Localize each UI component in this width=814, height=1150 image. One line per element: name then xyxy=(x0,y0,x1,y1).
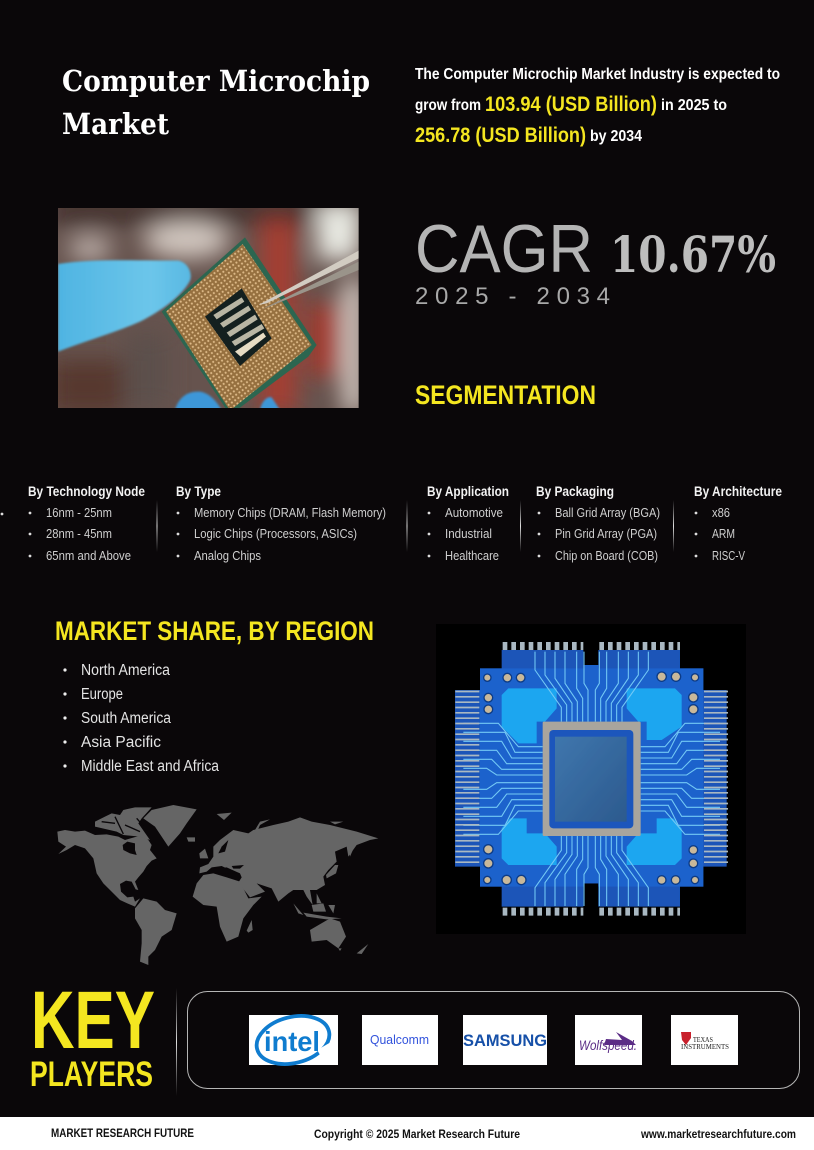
logo: texas instruments: INSTRUMENTS xyxy=(681,1043,729,1051)
logo: qualcomm: Qualcomm xyxy=(370,1032,429,1047)
footer: Copyright © 2025 Market Research Future xyxy=(314,1127,520,1141)
footer xyxy=(0,1117,814,1150)
segment: by type xyxy=(176,483,386,563)
region list: South America xyxy=(81,710,171,727)
segment: by technology node xyxy=(1,483,145,563)
segment: by architecture xyxy=(694,483,782,563)
key players panel xyxy=(188,992,800,1088)
title: Computer Microchip xyxy=(62,64,370,98)
segment: by architecture: ARM xyxy=(712,527,735,541)
segment: by architecture: By Architecture xyxy=(694,483,782,499)
CAGR figure xyxy=(415,211,776,310)
market size statement: 256.78 (USD Billion) xyxy=(415,124,586,147)
segment: by packaging: Ball Grid Array (BGA) xyxy=(555,506,660,520)
key players heading: PLAYERS xyxy=(30,1055,153,1094)
footer: MARKET RESEARCH FUTURE xyxy=(51,1126,194,1140)
logo: samsung: SAMSUNG xyxy=(463,1031,547,1050)
segment: by type: Logic Chips (Processors, ASICs) xyxy=(194,527,357,541)
segment: by type: By Type xyxy=(176,483,221,499)
heading: segmentation: SEGMENTATION xyxy=(415,380,596,410)
segment: by technology node: 28nm - 45nm xyxy=(46,527,112,541)
heading: market share by region: MARKET SHARE, BY REGION xyxy=(55,616,374,646)
CAGR figure: CAGR xyxy=(415,211,593,287)
segment: by packaging: Pin Grid Array (PGA) xyxy=(555,527,657,541)
CAGR figure: 10.67% xyxy=(610,225,776,284)
segment: by application: Industrial xyxy=(445,527,492,541)
region list: North America xyxy=(81,662,170,679)
logo: intel xyxy=(249,1009,338,1071)
market size statement: by 2034 xyxy=(590,128,642,145)
market size statement: 103.94 (USD Billion) xyxy=(485,93,657,116)
segment: by type: Memory Chips (DRAM, Flash Memory) xyxy=(194,506,386,520)
region list: Middle East and Africa xyxy=(81,758,219,775)
market size statement: grow from xyxy=(415,97,481,114)
segment: by technology node: 16nm - 25nm xyxy=(46,506,112,520)
segment: by application: By Application xyxy=(427,483,509,499)
market size statement: in 2025 to xyxy=(661,97,727,114)
region list: Asia Pacific xyxy=(81,734,161,751)
segment: by type: Analog Chips xyxy=(194,549,261,563)
title: Market xyxy=(62,107,170,141)
logo: intel: intel xyxy=(264,1026,320,1057)
CAGR figure: 2025 - 2034 xyxy=(415,283,610,310)
region list xyxy=(63,662,219,775)
illustration: blue circuit board chip xyxy=(436,624,746,934)
segment: by architecture: RISC-V xyxy=(712,549,746,563)
segment: by technology node: 65nm and Above xyxy=(46,549,131,563)
logo: qualcomm xyxy=(362,1015,438,1065)
segment: by packaging xyxy=(536,483,660,563)
logo: samsung xyxy=(463,1015,547,1065)
segment: by technology node: By Technology Node xyxy=(28,483,145,499)
logo: texas instruments xyxy=(671,1015,738,1065)
logo: wolfspeed: Wolfspeed. xyxy=(579,1037,637,1053)
key players heading xyxy=(30,975,155,1094)
title xyxy=(62,64,370,141)
region list: Europe xyxy=(81,686,123,703)
segment: by packaging: By Packaging xyxy=(536,483,614,499)
key players heading: KEY xyxy=(31,975,155,1066)
segment: by architecture: x86 xyxy=(712,506,730,520)
segment: by application xyxy=(427,483,509,563)
segment: by application: Healthcare xyxy=(445,549,499,563)
segment: by packaging: Chip on Board (COB) xyxy=(555,549,658,563)
world map xyxy=(57,805,378,965)
market size statement xyxy=(415,66,780,147)
logo: texas instruments: TEXAS xyxy=(693,1036,713,1044)
segment: by application: Automotive xyxy=(445,506,503,520)
photo: chip held by gloved hand and tweezers xyxy=(58,208,359,408)
logo: wolfspeed xyxy=(575,1015,642,1065)
